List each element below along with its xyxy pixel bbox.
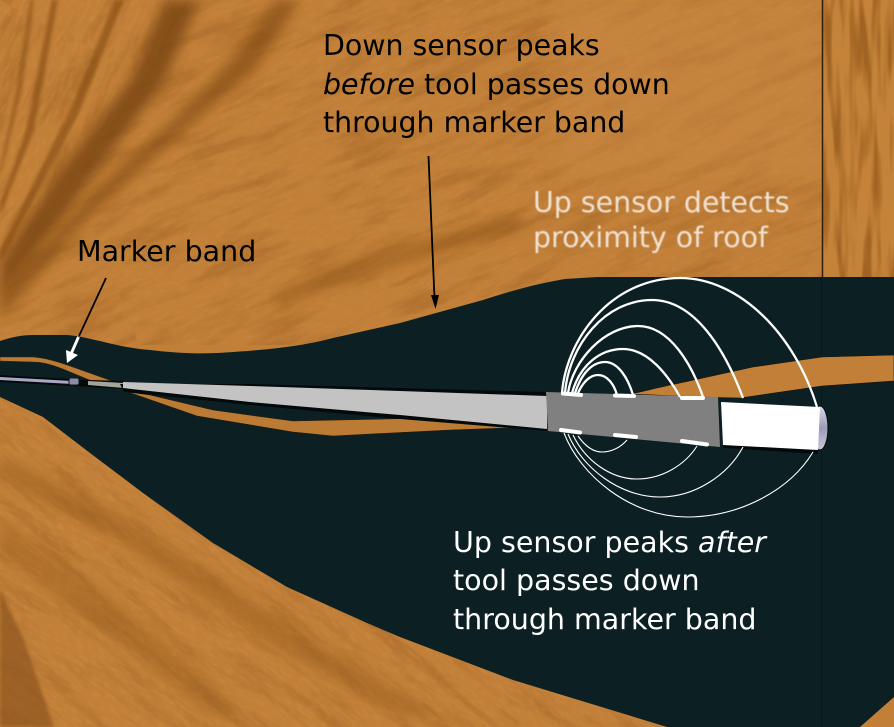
right faint seam in void (820, 277, 822, 727)
lower sensor field lines (564, 433, 813, 517)
white tool end section (721, 402, 820, 454)
label: up sensor peaks (453, 526, 768, 636)
label: up sensor detects roof (533, 186, 790, 254)
label: down sensor: before tool passes down (323, 68, 670, 101)
marker band right section (630, 355, 894, 398)
label: up sensor peaks: through marker band (453, 603, 756, 636)
label: up sensor peaks: tool passes down (453, 564, 700, 597)
label: up sensor detects roof: proximity of roof (533, 221, 769, 254)
end cap (812, 406, 828, 450)
tool tapered light section (120, 382, 547, 431)
label: down sensor: Down sensor peaks (323, 29, 600, 62)
label: down sensor (323, 29, 670, 139)
drill string (0, 375, 124, 389)
marker band under tool (128, 392, 537, 436)
arrow: marker band (66, 278, 106, 363)
label: down sensor: through marker band (323, 106, 625, 139)
gray sensor housing (546, 392, 720, 447)
label: up sensor peaks: Up sensor peaks after (453, 526, 768, 559)
vertical seam line (822, 0, 824, 277)
upper sensor field lines (562, 278, 817, 407)
marker band left section (0, 357, 112, 381)
arrow: down sensor callout (428, 156, 439, 309)
sensor pads (561, 394, 707, 444)
label: up sensor detects roof: Up sensor detects (533, 186, 790, 219)
label: marker band: Marker band (77, 235, 256, 268)
dark void between rock layers (0, 277, 894, 727)
